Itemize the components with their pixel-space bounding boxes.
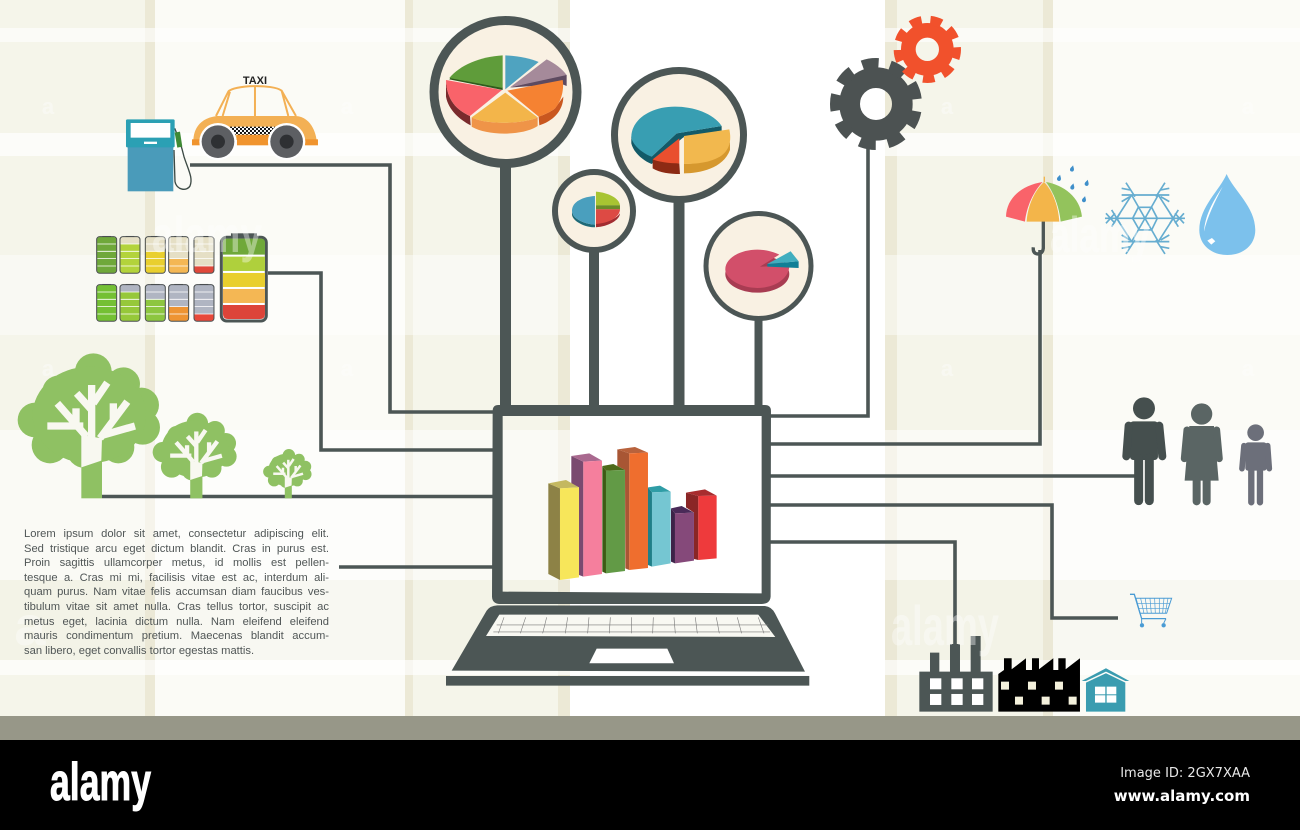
watermarks: alamy (152, 207, 262, 263)
icon: water drop (1199, 174, 1255, 255)
watermarks: a (1242, 94, 1255, 119)
icon: grey factory (919, 636, 993, 712)
text block: lorem ipsum: san libero, eget convallis tortor egestas mattis. (24, 645, 254, 657)
watermarks: a (42, 94, 55, 119)
icon: black factory (998, 658, 1080, 712)
icon: dark gear (825, 53, 927, 155)
text block: lorem ipsum: Proin sagittis ullamcorper metus, id mollis est pellen- (24, 557, 329, 569)
watermarks: a (341, 94, 354, 119)
icon: gears (825, 17, 959, 155)
icon: large tree (18, 353, 160, 498)
icon: taxi (192, 75, 318, 160)
text block: lorem ipsum: Lorem ipsum dolor sit amet, consectetur adipiscing elit. (24, 528, 329, 540)
watermarks: alamy (1050, 207, 1150, 263)
text block: lorem ipsum: tibulum vitae sit amet nulla. Cras tellus tortor, suscipit ac (24, 601, 329, 613)
watermarks: a (1242, 356, 1255, 381)
text block: lorem ipsum: metus eget, lacinia dictum nulla. Nam eleifend eleifend (24, 616, 329, 628)
footer logo: alamy (50, 753, 151, 812)
icon: umbrella (1006, 165, 1090, 254)
icon: large battery (221, 233, 266, 321)
watermarks: a (14, 594, 46, 657)
watermarks: a (941, 94, 954, 119)
text block: lorem ipsum (24, 528, 329, 657)
watermarks: a (341, 356, 354, 381)
icon: batteries (97, 233, 266, 321)
text block: lorem ipsum: mauris condimentum pretium. Maecenas blandit accum- (24, 630, 329, 642)
website: www.alamy.com (1114, 787, 1250, 805)
footer bar (0, 716, 1300, 830)
pie circle 4 (706, 214, 811, 318)
text block: lorem ipsum: Sed tristique arcu eget dictum blandit. Cras in purus est. (24, 543, 329, 555)
icon: snowflake (1105, 183, 1185, 254)
icon: umbrella, snowflake and water drop (1006, 165, 1255, 255)
icon: man (1126, 397, 1162, 501)
watermarks: alamy (891, 594, 999, 657)
bar chart (548, 447, 717, 580)
pie circle 1 (434, 20, 577, 164)
icon: factories and house (919, 636, 1129, 712)
watermarks: a (941, 356, 954, 381)
watermarks: a (42, 356, 55, 381)
laptop (446, 405, 809, 686)
text block: lorem ipsum: tesque a. Cras mi mi, facilisis vitae est ac, interdum ali- (24, 572, 329, 584)
icon: gas pump (126, 119, 191, 191)
icon: shopping cart (1130, 594, 1172, 627)
icon: woman (1184, 403, 1219, 501)
icon: medium tree (153, 413, 237, 498)
pie circle 2 (614, 70, 744, 200)
icon: child (1242, 424, 1269, 502)
watermarks (14, 94, 1255, 657)
icon: red gear (895, 17, 959, 81)
text block: lorem ipsum: quam purus. Nam vitae felis accumsan diam faucibus ves- (24, 586, 329, 598)
pie circle 3 small (555, 172, 633, 250)
icon: family (1126, 397, 1269, 502)
image id: Image ID: 2GX7XAA (1120, 766, 1250, 781)
icon: trees (18, 353, 312, 498)
icon: small tree (263, 449, 312, 498)
connector lines (102, 148, 1136, 645)
icon: house (1082, 668, 1129, 712)
icon: taxi: TAXI (243, 75, 267, 87)
